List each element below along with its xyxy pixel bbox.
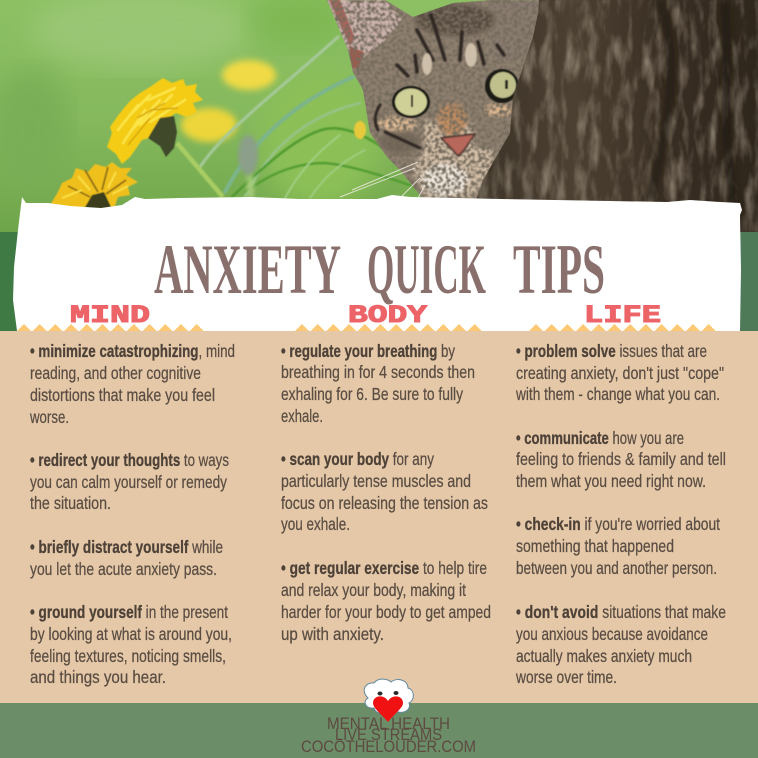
tip: minimize catastrophizing: worse.	[29, 407, 69, 427]
footer text: COCOTHELOUDER.COM	[301, 738, 476, 756]
photo: cat peeking around a tree in a meadow	[0, 0, 758, 232]
torn white paper header	[13, 195, 742, 331]
tip: problem solve	[515, 341, 724, 404]
tip: ground yourself: feeling textures, noticing smells,	[30, 646, 226, 666]
seed head	[238, 135, 258, 198]
cat head	[327, 0, 539, 198]
tip: scan your body	[281, 449, 488, 534]
cat face colouring	[377, 4, 513, 198]
tip: redirect your thoughts	[30, 450, 229, 513]
cat nose	[441, 134, 475, 156]
tip: communicate	[516, 428, 726, 491]
whiskers	[340, 162, 425, 198]
column: body tips	[281, 341, 491, 644]
column: life tips	[515, 341, 726, 687]
side band: left	[0, 232, 30, 332]
tip: briefly distract yourself: you let the acute anxiety pass.	[30, 559, 217, 579]
beige content panel	[0, 331, 758, 703]
tip: check-in: something that happened	[516, 536, 674, 556]
tip: scan your body: focus on releasing the tension as	[281, 493, 488, 513]
tip: scan your body: particularly tense muscles and	[281, 471, 471, 491]
tip: ground yourself: • ground yourself in the present	[30, 602, 228, 622]
tip: communicate: • communicate how you are	[516, 428, 684, 448]
footer text	[301, 715, 476, 756]
pale forehead patches	[422, 43, 477, 75]
tip: check-in: • check-in if you're worried about	[516, 514, 720, 534]
tip: redirect your thoughts: the situation.	[30, 493, 111, 513]
tip: communicate: them what you need right now.	[516, 471, 706, 491]
tip: regulate your breathing: breathing in for 4 seconds then	[281, 362, 475, 382]
column heading: body: BODY	[348, 301, 427, 330]
blurred dandelions in the background	[181, 60, 276, 142]
dandelion stem	[177, 143, 223, 197]
tip: redirect your thoughts: • redirect your thoughts to ways	[30, 450, 229, 470]
tip: don't avoid	[515, 602, 726, 687]
tip: ground yourself: by looking at what is around you,	[30, 624, 232, 644]
footer text: MENTAL HEALTH	[327, 715, 450, 733]
tip: ground yourself	[30, 602, 232, 687]
tip: briefly distract yourself	[30, 537, 223, 579]
column heading: mind: MIND	[70, 301, 150, 330]
title: QUICK	[367, 231, 486, 309]
footer text: LIVE STREAMS	[335, 726, 442, 744]
icon: smiling cloud holding a heart	[364, 679, 413, 722]
grass blades	[200, 37, 418, 198]
tip: get regular exercise	[281, 558, 491, 644]
tip: don't avoid: worse over time.	[515, 667, 617, 687]
tip: get regular exercise: and relax your body, making it	[281, 580, 466, 600]
cat ear	[327, 0, 402, 60]
tip: don't avoid: • don't avoid situations that make	[516, 602, 726, 622]
cat right eye	[485, 69, 519, 103]
dandelion: lower	[50, 162, 138, 209]
column heading: life: LIFE	[584, 301, 661, 330]
tip: regulate your breathing: • regulate your breathing by	[281, 341, 455, 361]
tip: get regular exercise: harder for your body to get amped	[281, 602, 491, 622]
tip: get regular exercise: • get regular exercise to help tire	[281, 558, 487, 578]
dandelion: upper	[107, 78, 203, 164]
tip: briefly distract yourself: • briefly distract yourself while	[30, 537, 223, 557]
tip: ground yourself: and things you hear.	[30, 667, 166, 687]
tip: check-in	[516, 514, 720, 578]
zigzag: mind	[17, 324, 204, 331]
column: mind tips	[29, 341, 235, 687]
meadow background	[0, 0, 560, 232]
side band: right	[730, 232, 758, 332]
cloud	[364, 679, 413, 714]
forehead stripes	[375, 15, 504, 148]
tip: redirect your thoughts: you can calm yourself or remedy	[30, 472, 227, 492]
tip: regulate your breathing: exhale.	[281, 406, 323, 426]
zigzag: body	[295, 324, 482, 331]
tip: don't avoid: you anxious because avoidance	[516, 624, 708, 644]
cloud eyes	[378, 691, 398, 696]
tip: minimize catastrophizing: • minimize catastrophizing, mind	[30, 341, 235, 361]
small yellow flower behind cat	[354, 121, 366, 139]
tip: problem solve: • problem solve issues that are	[516, 341, 707, 361]
zigzag: life	[529, 324, 716, 331]
cat left eye	[392, 86, 430, 118]
tip: get regular exercise: up with anxiety.	[281, 624, 384, 644]
tip: scan your body: you exhale.	[281, 514, 350, 534]
tip: minimize catastrophizing: distortions that make you feel	[30, 385, 215, 405]
tip: minimize catastrophizing: reading, and other cognitive	[30, 363, 201, 383]
heart	[373, 696, 403, 722]
cat right ear	[483, 0, 560, 62]
footer band	[0, 703, 758, 758]
tip: regulate your breathing	[281, 341, 475, 426]
title: ANXIETY	[154, 231, 341, 309]
tip: don't avoid: actually makes anxiety much	[516, 646, 692, 666]
tree trunk	[474, 0, 758, 232]
title: TIPS	[513, 231, 605, 309]
tip: regulate your breathing: exhaling for 6. Be sure to fully	[281, 384, 463, 404]
tip: minimize catastrophizing	[29, 341, 235, 427]
tip: scan your body: • scan your body for any	[281, 449, 434, 469]
